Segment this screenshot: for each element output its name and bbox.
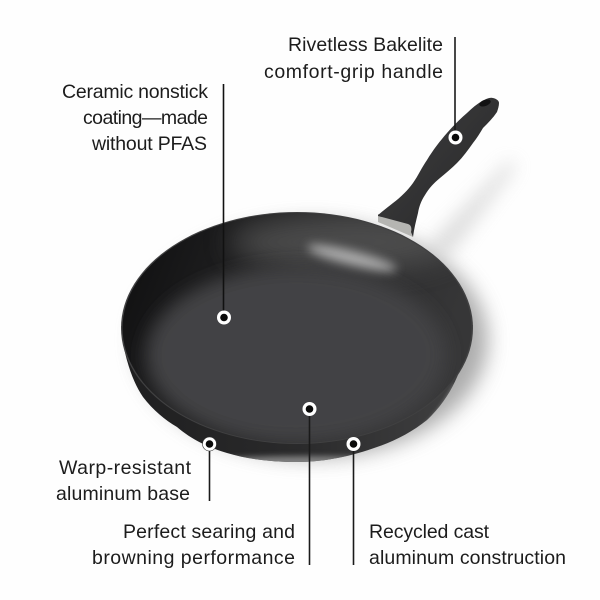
label: construction: Recycled cast xyxy=(369,521,490,543)
callout: handle xyxy=(264,34,462,144)
callout: coating: without PFAS xyxy=(91,133,207,155)
label: searing: Perfect searing and xyxy=(123,521,295,543)
highlight on far wall xyxy=(306,240,398,276)
callout: coating: coating—made xyxy=(83,107,208,129)
callout: searing xyxy=(92,402,316,569)
label: base: Warp-resistant xyxy=(59,457,192,479)
callout: base: aluminum base xyxy=(56,483,190,505)
callout: construction xyxy=(346,437,566,569)
callout: searing: browning performance xyxy=(92,547,295,569)
label: handle: Rivetless Bakelite xyxy=(288,34,443,56)
label: coating: Ceramic nonstick xyxy=(62,81,208,103)
callout: construction: aluminum construction xyxy=(369,547,566,569)
pan inner wall xyxy=(120,212,475,444)
callout: base xyxy=(56,437,216,505)
icon: frying pan xyxy=(115,212,480,470)
pan shadow xyxy=(136,160,516,458)
pan rim xyxy=(121,212,473,444)
icon: pan handle xyxy=(378,98,499,237)
pan cooking floor xyxy=(146,267,446,443)
pan outer body xyxy=(121,325,473,462)
lighter far wall xyxy=(230,214,460,270)
pan inner wall and floor xyxy=(120,212,475,444)
callout: coating xyxy=(62,81,231,324)
callout: handle: comfort-grip handle xyxy=(264,61,443,83)
